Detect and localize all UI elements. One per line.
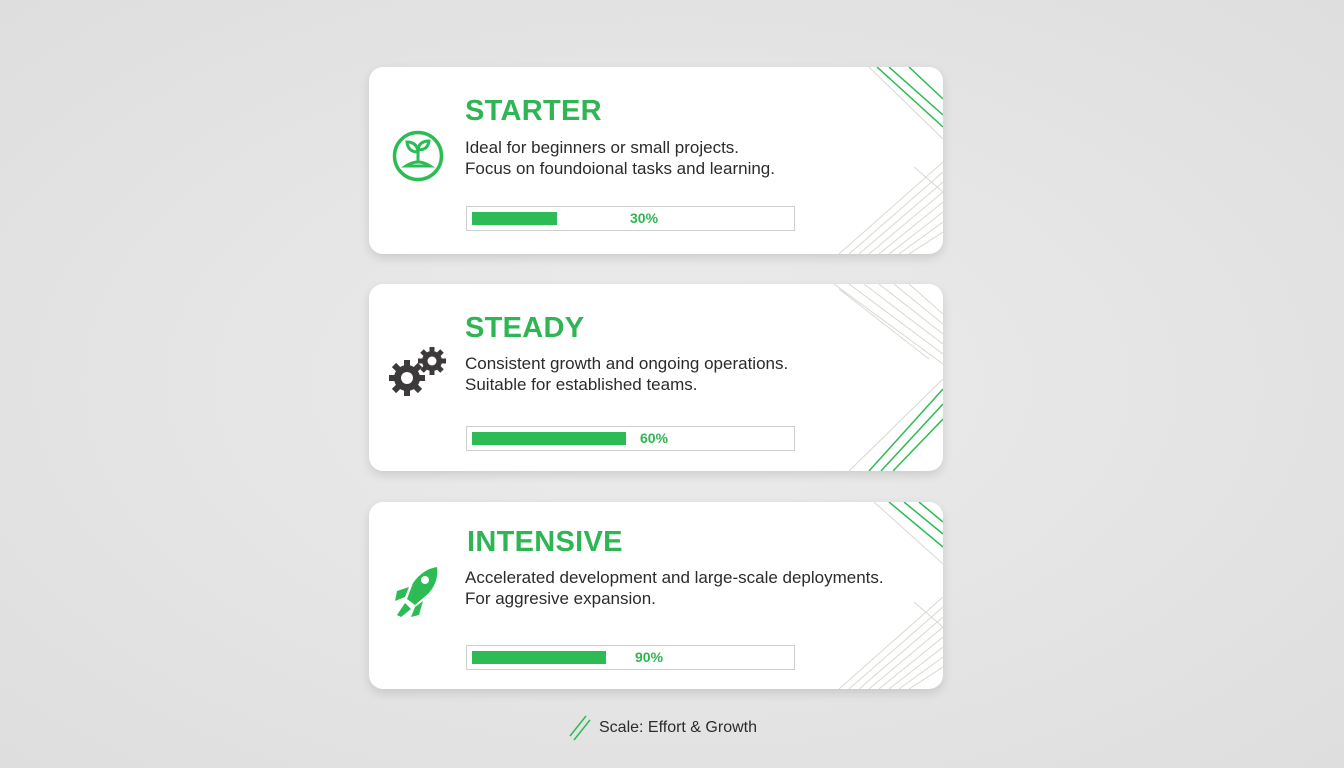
card: steady [369,284,943,471]
description [465,568,884,608]
icon: sprout [392,130,444,182]
description: Accelerated development and large-scale deployments. [465,568,884,587]
progress bar 90% [466,645,795,670]
icon: rocket [395,567,438,617]
card: intensive [369,502,943,689]
description [465,354,788,394]
legend: scale: Scale: Effort & Growth [599,719,757,736]
title: INTENSIVE [467,526,623,558]
progress bar 60%: 60% [640,430,668,446]
title: STEADY [465,312,584,344]
icon: gears [389,347,446,396]
card: starter [369,67,943,254]
description: Consistent growth and ongoing operations. [465,354,788,373]
title: STARTER [465,95,602,127]
legend: scale [570,716,757,740]
description [465,138,775,178]
progress bar 60% [466,426,795,451]
description: Focus on foundoional tasks and learning. [465,158,775,178]
description: Ideal for beginners or small projects. [465,138,739,157]
progress bar 30% [466,206,795,231]
description: For aggresive expansion. [465,588,656,608]
progress bar 90%: 90% [635,649,663,665]
progress bar 30%: 30% [630,210,658,226]
description: Suitable for established teams. [465,374,697,394]
